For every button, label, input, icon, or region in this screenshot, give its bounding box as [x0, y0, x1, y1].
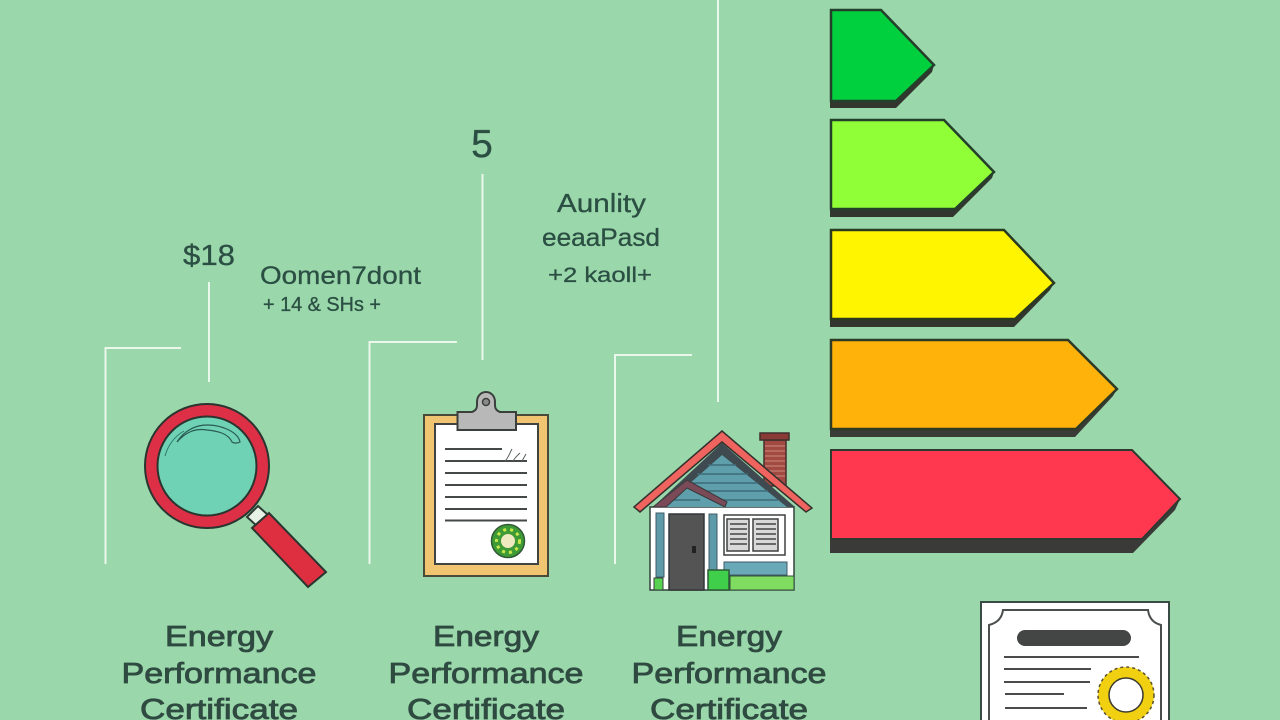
caption: first column: Performance: [122, 658, 316, 690]
chimney: [760, 433, 789, 486]
caption: first column: [122, 621, 316, 720]
caption: third column: Performance: [632, 658, 826, 690]
garbled label: first callout: [260, 262, 421, 316]
energy rating bar: lime: [830, 120, 994, 217]
garbled label: second callout: +2 kaoll+: [548, 264, 652, 287]
energy rating bar: yellow: [830, 230, 1054, 327]
caption: second column: Performance: [388, 658, 584, 690]
garbled label: second callout: [542, 188, 660, 287]
caption: second column: [388, 621, 584, 720]
garbled label: first callout: + 14 & SHs +: [263, 294, 381, 316]
caption: first column: Energy: [165, 621, 274, 653]
energy rating bar: orange: [830, 340, 1117, 437]
number label: $18: $18: [183, 240, 235, 272]
caption: third column: Energy: [676, 621, 783, 653]
energy rating bar: red: [830, 450, 1180, 553]
icon: house: [634, 431, 812, 590]
caption: third column: [632, 621, 826, 720]
garbled label: second callout: Aunlity: [557, 188, 646, 218]
garbled label: second callout: eeaaPasd: [542, 224, 660, 252]
number label: 5: 5: [471, 123, 493, 166]
garbled label: first callout: Oomen7dont: [260, 262, 421, 290]
caption: second column: Energy: [433, 621, 540, 653]
energy rating bar: green: [830, 10, 934, 108]
icon: certificate with seal: [981, 602, 1169, 720]
window: [724, 515, 785, 555]
icon: clipboard with document: [424, 392, 548, 576]
icon: magnifying glass: [145, 404, 326, 587]
